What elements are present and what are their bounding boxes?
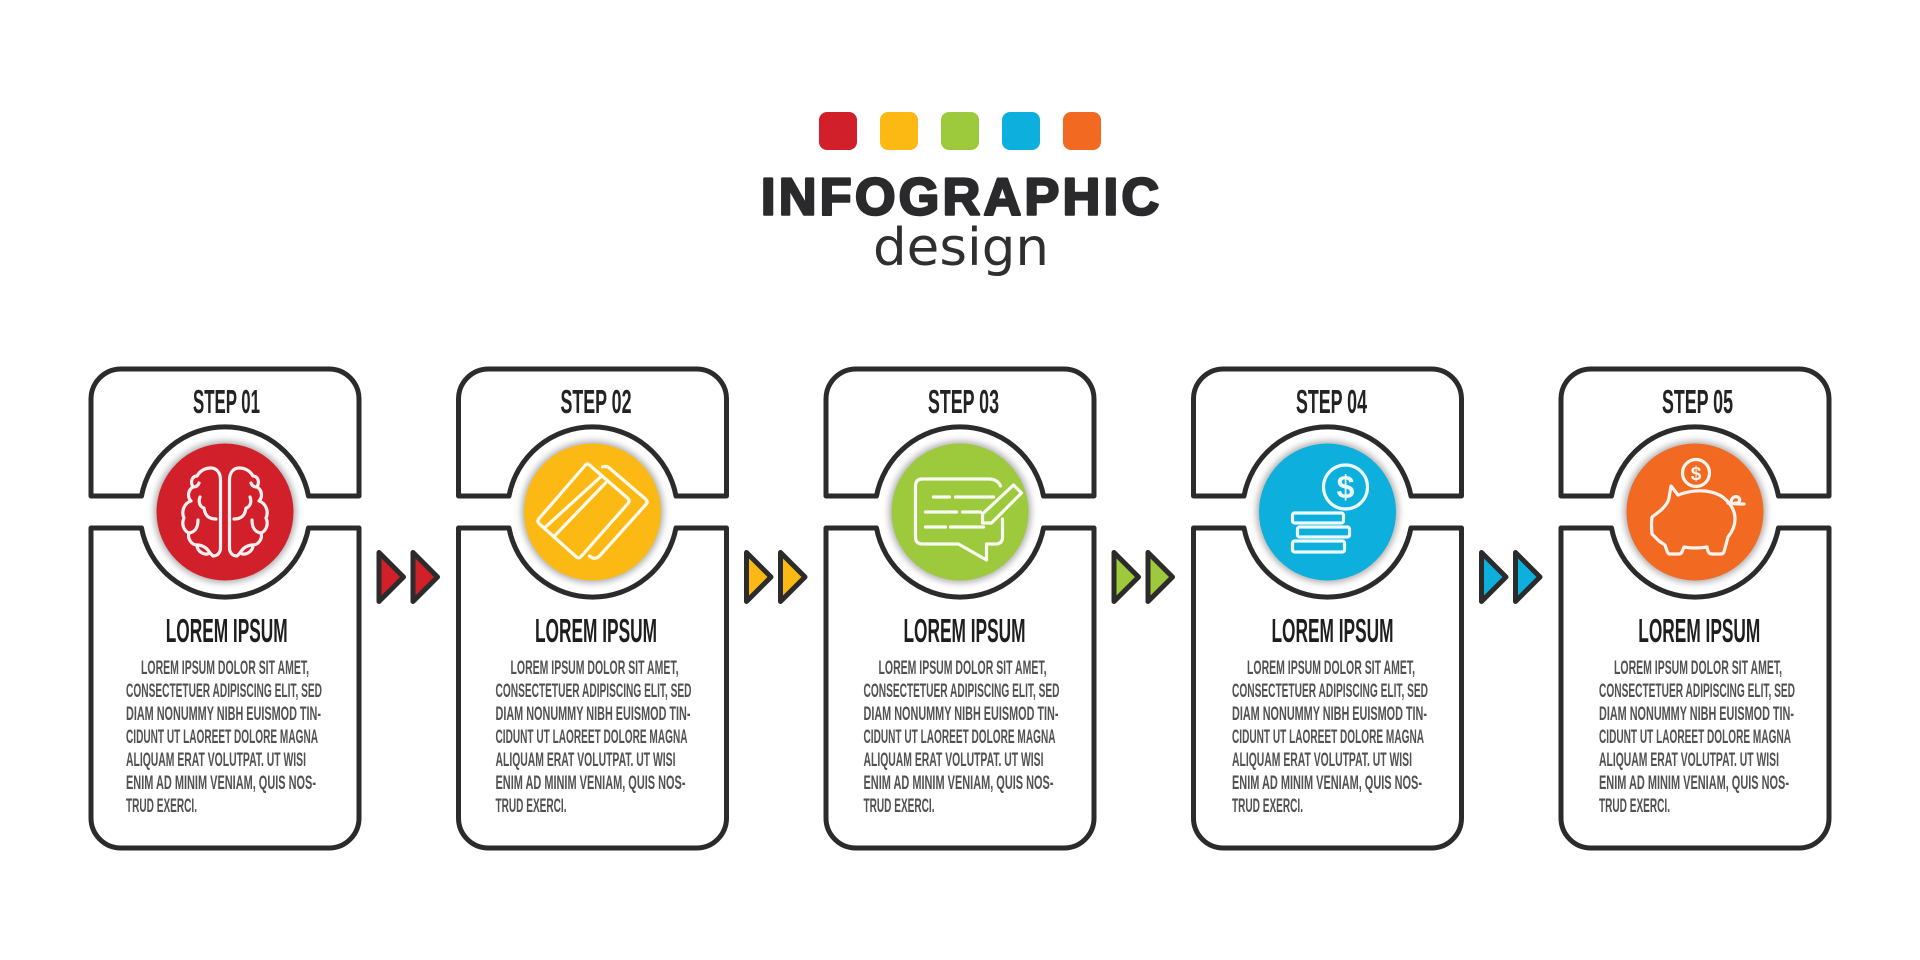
title: INFOGRAPHIC (761, 168, 1159, 226)
step 1 body text: TRUD EXERCI. (126, 795, 197, 817)
panel: step 4 (1194, 369, 1462, 848)
step 2 circle shadow (522, 441, 664, 583)
step 4 body text: CONSECTETUER ADIPISCING ELIT, SED (1232, 680, 1428, 702)
step 1 body text: ENIM AD MINIM VENIAM, QUIS NOS- (126, 772, 316, 794)
step 1 body text (126, 657, 322, 817)
step 3 body text: ENIM AD MINIM VENIAM, QUIS NOS- (864, 772, 1054, 794)
step 5 body text: LOREM IPSUM DOLOR SIT AMET, (1614, 657, 1782, 679)
step 3 body frame (826, 528, 1094, 848)
step 5 label: STEP 05 (1662, 383, 1733, 420)
step 4 body text: ALIQUAM ERAT VOLUTPAT. UT WISI (1232, 749, 1412, 771)
icon: chat bubble with pen (916, 479, 1022, 560)
step 3 body text: ALIQUAM ERAT VOLUTPAT. UT WISI (864, 749, 1044, 771)
step 2 body text: LOREM IPSUM DOLOR SIT AMET, (510, 657, 678, 679)
step 5 body text (1599, 657, 1795, 817)
icon: piggy bank (1652, 460, 1744, 554)
step 1 body text: LOREM IPSUM DOLOR SIT AMET, (141, 657, 309, 679)
step 4 body text: LOREM IPSUM DOLOR SIT AMET, (1247, 657, 1415, 679)
panel: step 2 (458, 369, 726, 848)
step 4 circle (1259, 444, 1396, 580)
panel: step 5 (1561, 369, 1829, 848)
step 5 circle (1626, 444, 1764, 580)
step 4 circle shadow (1256, 441, 1398, 583)
step 3 heading: LOREM IPSUM (904, 612, 1026, 649)
step 5 body frame (1561, 528, 1829, 848)
step 1 circle shadow (154, 441, 296, 583)
step 3 body text (864, 657, 1060, 817)
step 1 body text: ALIQUAM ERAT VOLUTPAT. UT WISI (126, 749, 306, 771)
step 4 body frame (1194, 528, 1462, 848)
step 1 body frame (91, 528, 359, 848)
step 4 body text: DIAM NONUMMY NIBH EUISMOD TIN- (1232, 703, 1427, 725)
step 1 circle (156, 444, 294, 580)
step 1 label: STEP 01 (193, 383, 260, 420)
icon: cards (538, 464, 647, 558)
step 3 body text: DIAM NONUMMY NIBH EUISMOD TIN- (864, 703, 1058, 725)
step 1 body text: DIAM NONUMMY NIBH EUISMOD TIN- (126, 703, 321, 725)
step 2 heading: LOREM IPSUM (535, 612, 657, 649)
icon: coins (1292, 465, 1368, 552)
step 4 header frame (1194, 369, 1462, 496)
step 2 label: STEP 02 (560, 383, 632, 420)
step 3 body text: CONSECTETUER ADIPISCING ELIT, SED (864, 680, 1060, 702)
subtitle: design (873, 218, 1049, 278)
step 3 label: STEP 03 (928, 383, 999, 420)
step 3 circle shadow (889, 441, 1031, 583)
step 4 body text (1232, 657, 1428, 817)
icon: piggy bank: $ (1691, 464, 1702, 485)
step 3 body text: TRUD EXERCI. (864, 795, 934, 817)
step 1 body text: CIDUNT UT LAOREET DOLORE MAGNA (126, 726, 318, 748)
arrows: step 2 to 3 (746, 552, 805, 602)
step 2 body text (496, 657, 692, 817)
step 5 circle shadow (1624, 441, 1766, 583)
step 1 heading: LOREM IPSUM (166, 612, 288, 649)
step 2 body text: TRUD EXERCI. (496, 795, 566, 817)
step 2 body text: ENIM AD MINIM VENIAM, QUIS NOS- (496, 772, 686, 794)
step 5 header frame (1561, 369, 1829, 496)
step 3 body text: LOREM IPSUM DOLOR SIT AMET, (878, 657, 1046, 679)
arrows: step 1 to 2 (379, 552, 438, 602)
step 2 body text: DIAM NONUMMY NIBH EUISMOD TIN- (496, 703, 690, 725)
step 3 header frame (826, 369, 1094, 496)
step 2 body text: ALIQUAM ERAT VOLUTPAT. UT WISI (496, 749, 676, 771)
arrows: step 4 to 5 (1482, 552, 1540, 602)
icon: coins: $ (1337, 469, 1355, 505)
step 4 body text: ENIM AD MINIM VENIAM, QUIS NOS- (1232, 772, 1422, 794)
colour squares (819, 112, 1101, 150)
step 5 body text: TRUD EXERCI. (1599, 795, 1670, 817)
step 1 body text: CONSECTETUER ADIPISCING ELIT, SED (126, 680, 322, 702)
step 3 circle (892, 444, 1028, 580)
panel: step 3 (826, 369, 1094, 848)
icon: brain (183, 468, 267, 556)
step 4 heading: LOREM IPSUM (1272, 612, 1394, 649)
step 2 body text: CIDUNT UT LAOREET DOLORE MAGNA (496, 726, 688, 748)
step 3 body text: CIDUNT UT LAOREET DOLORE MAGNA (864, 726, 1056, 748)
step 2 body text: CONSECTETUER ADIPISCING ELIT, SED (496, 680, 692, 702)
step 1 header frame (91, 369, 359, 496)
step 2 header frame (458, 369, 726, 496)
step 4 body text: CIDUNT UT LAOREET DOLORE MAGNA (1232, 726, 1424, 748)
panel: step 1 (91, 369, 359, 848)
arrows: step 3 to 4 (1114, 552, 1172, 602)
step 5 heading: LOREM IPSUM (1638, 612, 1760, 649)
step 4 label: STEP 04 (1296, 383, 1367, 420)
step 2 body frame (458, 528, 726, 848)
step 4 body text: TRUD EXERCI. (1232, 795, 1303, 817)
step 2 circle (524, 444, 661, 580)
